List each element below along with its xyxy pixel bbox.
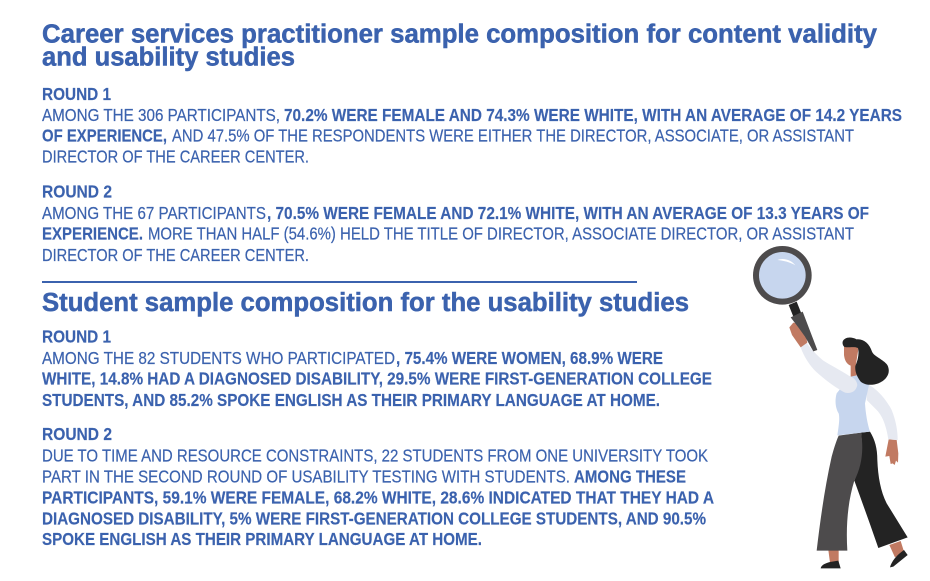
hair (843, 337, 889, 385)
text block: practitioner round 1: ROUND 1 (42, 84, 111, 104)
text block: student round 2: DUE TO TIME AND RESOURCE CONSTRAINTS, 22 STUDENTS FROM ONE UNIVERSITY TOOK (42, 446, 708, 466)
skin: legs (828, 541, 904, 563)
heading: student sample composition: Student sample composition for the usability studies (42, 289, 689, 317)
text block: student round 2: PARTICIPANTS, 59.1% WERE FEMALE, 68.2% WHITE, 28.6% INDICATED THAT THEY HAD A (42, 488, 714, 508)
magnifying glass (753, 246, 817, 351)
text block: practitioner round 2: EXPERIENCE. (42, 224, 143, 244)
text block: practitioner round 1: DIRECTOR OF THE CAREER CENTER. (42, 147, 309, 167)
trousers: front leg (817, 433, 862, 551)
text block: student round 1: WHITE, 14.8% HAD A DIAGNOSED DISABILITY, 29.5% WERE FIRST-GENERATION COLLEGE (42, 369, 712, 389)
text block: student round 1: AMONG THE 82 STUDENTS WHO PARTICIPATED (42, 348, 395, 368)
neck and face (844, 346, 859, 377)
text block: student round 2: DIAGNOSED DISABILITY, 5% WERE FIRST-GENERATION COLLEGE STUDENTS, AND 90.5% (42, 508, 706, 528)
title: career services practitioner (42, 20, 878, 72)
shoes (821, 550, 908, 568)
torso (836, 374, 870, 435)
text block: student round 1: , 75.4% WERE WOMEN, 68.9% WERE (396, 348, 663, 368)
text block: student round 1: ROUND 1 (42, 327, 111, 347)
text block: practitioner round 2: ROUND 2 (42, 182, 112, 202)
trousers: rear leg (854, 432, 908, 548)
text block: student round 1: STUDENTS, AND 85.2% SPOKE ENGLISH AS THEIR PRIMARY LANGUAGE AT HOME. (42, 390, 660, 410)
text block: student round 2: PART IN THE SECOND ROUND OF USABILITY TESTING WITH STUDENTS. (42, 466, 570, 486)
text block: student round 2: SPOKE ENGLISH AS THEIR PRIMARY LANGUAGE AT HOME. (42, 529, 482, 549)
text block: practitioner round 1 (42, 84, 902, 167)
text block: practitioner round 2 (42, 182, 869, 265)
raised arm (801, 342, 857, 393)
text block: practitioner round 2: , 70.5% WERE FEMALE AND 72.1% WHITE, WITH AN AVERAGE OF 13.3 YEARS OF (267, 203, 869, 223)
text block: student round 2: ROUND 2 (42, 424, 112, 444)
rear arm and hand (867, 384, 898, 465)
raised hand (789, 323, 807, 347)
title: career services practitioner: Career services practitioner sample composition for content validity (42, 20, 878, 48)
text block: student round 1 (42, 327, 712, 410)
title: career services practitioner: and usability studies (42, 44, 295, 72)
text block: student round 2 (42, 424, 714, 549)
icon: woman holding magnifying glass (753, 246, 908, 568)
text block: practitioner round 1: OF EXPERIENCE, (42, 126, 167, 146)
text block: student round 2: AMONG THESE (574, 466, 686, 486)
text block: practitioner round 2: DIRECTOR OF THE CAREER CENTER. (42, 245, 309, 265)
text block: practitioner round 2: AMONG THE 67 PARTICIPANTS (42, 203, 266, 223)
text block: practitioner round 1: AMONG THE 306 PARTICIPANTS, (42, 105, 280, 125)
